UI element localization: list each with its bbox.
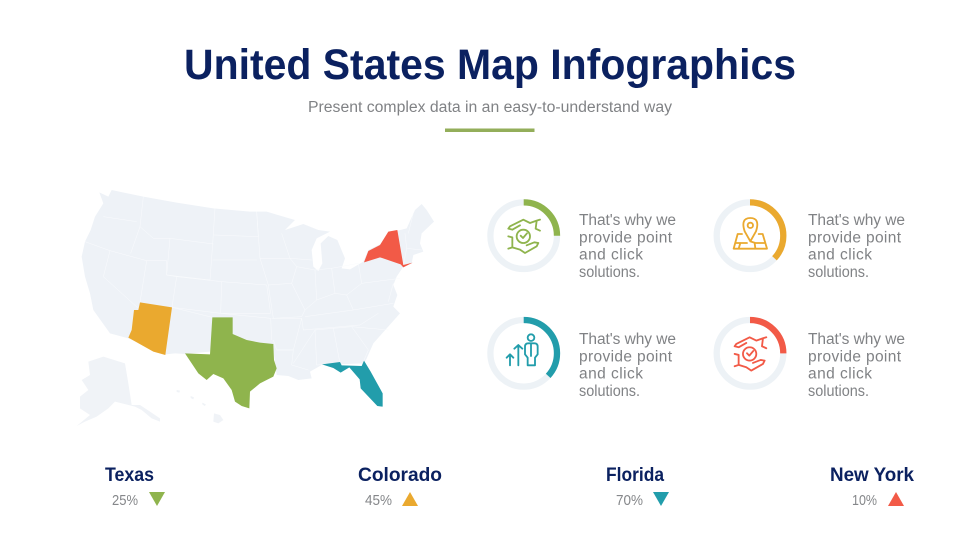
text: teal item: That's why we (579, 331, 676, 348)
map: state borders (85, 197, 422, 370)
text: green item (579, 212, 676, 281)
stat: Texas (105, 465, 165, 509)
stat: New York: 10% (852, 492, 877, 509)
title underline (445, 128, 534, 132)
chart: United States map (77, 190, 434, 426)
map: Hawaii (177, 390, 223, 423)
panel: yellow item (717, 202, 905, 281)
icon: hands holding check (735, 337, 766, 371)
icon: hands holding check (508, 220, 540, 253)
text: red item: and click (808, 366, 872, 382)
stat: Florida (606, 465, 669, 509)
ring: teal progress (490, 320, 557, 387)
panel: red item (717, 320, 905, 400)
stat: Colorado: Colorado (358, 465, 442, 486)
panel: green item (490, 202, 676, 281)
icon: down triangle (149, 492, 165, 506)
ring: red progress (717, 320, 783, 387)
stat: Texas: Texas (105, 465, 154, 486)
text: red item (808, 331, 905, 400)
text: teal item: provide point (579, 348, 673, 365)
title: United States Map Infographics (184, 41, 796, 89)
ring: yellow progress (717, 202, 783, 269)
stat: Florida: 70% (616, 492, 643, 509)
stat: New York: New York (830, 465, 914, 486)
state: Florida (322, 361, 383, 407)
text: teal item (579, 331, 676, 400)
text: yellow item: solutions. (808, 264, 869, 281)
text: green item: and click (579, 246, 643, 264)
stat: Colorado (358, 465, 442, 509)
stat: New York (830, 465, 914, 509)
subtitle: Present complex data in an easy-to-understand way (308, 99, 672, 116)
text: yellow item: provide point (808, 229, 902, 246)
state: Texas (185, 317, 277, 408)
text: red item: That's why we (808, 331, 905, 348)
icon: down triangle (653, 492, 669, 506)
icon: person with arrows (507, 334, 538, 365)
stat: Florida: Florida (606, 465, 664, 486)
text: teal item: solutions. (579, 383, 640, 400)
stat: Texas: 25% (112, 492, 138, 509)
text: teal item: and click (579, 366, 643, 382)
text: red item: provide point (808, 348, 902, 365)
icon: up triangle (402, 492, 418, 506)
text: green item: provide point (579, 229, 673, 246)
map: mainland states (82, 190, 434, 380)
state: Arizona (128, 302, 172, 355)
panel: teal item (490, 320, 676, 400)
text: yellow item: and click (808, 246, 872, 264)
text: red item: solutions. (808, 383, 869, 400)
map: Alaska (77, 357, 160, 426)
text: yellow item: That's why we (808, 212, 905, 229)
text: green item: That's why we (579, 212, 676, 229)
ring: green progress (490, 202, 557, 269)
state: New York (364, 230, 413, 267)
stat: Colorado: 45% (365, 492, 392, 509)
icon: up triangle (888, 492, 904, 506)
icon: map pin (734, 218, 767, 249)
text: yellow item (808, 212, 905, 281)
text: green item: solutions. (579, 264, 640, 281)
